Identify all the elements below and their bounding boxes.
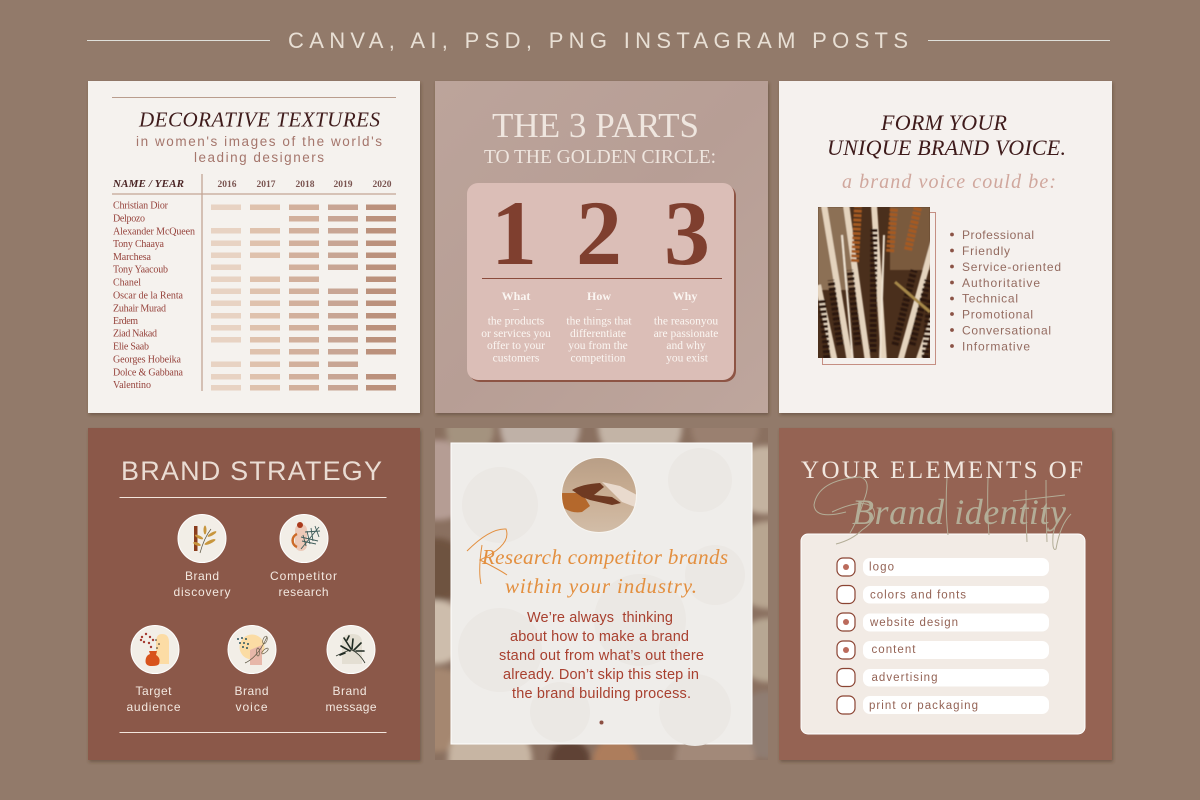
heading: form your brand voice	[827, 110, 1066, 160]
body text: We’re always thinking	[527, 610, 673, 626]
bullet list: Informative	[962, 340, 1030, 354]
heading: decorative textures: DECORATIVE TEXTURES	[138, 108, 380, 132]
designer names: Tony Yaacoub	[113, 264, 168, 276]
table header: 2017	[256, 180, 276, 190]
table header: NAME / YEAR	[112, 178, 184, 190]
checklist labels: print or packaging	[869, 700, 978, 712]
bullet list	[950, 228, 1061, 354]
label: brand discovery: discovery	[174, 585, 230, 599]
subheading: women's images: leading designers	[194, 150, 324, 165]
designer names	[113, 200, 195, 391]
column: how: How	[587, 289, 611, 303]
designer names: Oscar de la Renta	[113, 290, 184, 302]
subheading: women's images	[136, 134, 382, 165]
label: competitor research: research	[278, 585, 328, 599]
column: what: –	[512, 303, 519, 315]
icon: competitor research	[280, 514, 328, 562]
column: what: or services you	[481, 328, 551, 340]
script heading	[467, 529, 728, 598]
body text	[499, 610, 704, 702]
designer names: Ziad Nakad	[113, 328, 157, 340]
table header: 2020	[372, 180, 392, 190]
label: target audience	[126, 684, 181, 714]
label: brand message: message	[326, 700, 377, 714]
panel: decorative textures table	[88, 81, 420, 413]
panel: brand strategy	[88, 428, 420, 760]
table header	[112, 178, 392, 190]
checklist labels	[869, 562, 978, 712]
bullet list: Promotional	[962, 308, 1033, 322]
label: brand discovery: Brand	[185, 569, 219, 583]
table header: 2019	[334, 180, 353, 190]
column: why: Why	[673, 289, 697, 303]
panel: form your unique brand voice	[779, 81, 1112, 413]
body text: about how to make a brand	[510, 629, 689, 645]
designer names: Zuhair Murad	[113, 304, 166, 314]
column: what	[481, 289, 551, 364]
heading: your elements of: YOUR ELEMENTS OF	[801, 457, 1083, 484]
label: target audience: Target	[136, 684, 172, 698]
icon: brand discovery	[178, 514, 226, 562]
bars: 2019	[328, 204, 358, 390]
body text: the brand building process.	[512, 686, 691, 702]
heading: form your brand voice: UNIQUE BRAND VOICE.	[827, 135, 1066, 160]
script heading: within your industry.	[505, 574, 697, 598]
column: how: competition	[571, 352, 626, 364]
icon: brand voice	[228, 626, 276, 674]
designer names: Marchesa	[113, 252, 152, 263]
numerals	[491, 182, 710, 284]
numerals: 3	[664, 182, 710, 284]
bars: 2020	[366, 204, 396, 390]
designer names: Alexander McQueen	[113, 226, 195, 238]
designer names: Georges Hobeika	[113, 354, 182, 366]
pills	[863, 558, 1049, 714]
heading: the 3 parts: TO THE GOLDEN CIRCLE:	[484, 147, 716, 168]
label: brand message: Brand	[332, 684, 366, 698]
designer names: Christian Dior	[113, 200, 169, 212]
column: how: the things that	[566, 316, 632, 328]
column: why: are passionate	[654, 328, 718, 340]
bullet list: Service-oriented	[962, 260, 1061, 274]
card: research text	[451, 443, 752, 746]
card: checklist	[801, 534, 1085, 734]
designer names: Erdem	[113, 316, 138, 327]
checklist labels: content	[872, 644, 916, 656]
bars: 2017	[250, 204, 280, 390]
designer names: Dolce & Gabbana	[113, 368, 184, 378]
column: what: What	[502, 289, 530, 303]
subheading: women's images: in women's images of the world's	[136, 134, 382, 149]
panel: the 3 parts to the golden circle	[435, 81, 768, 413]
label: competitor research	[270, 569, 337, 599]
photo frame	[822, 212, 936, 364]
icon: target audience	[131, 626, 179, 674]
panel: research competitor brands	[435, 428, 768, 760]
bullet list: Technical	[962, 292, 1018, 306]
photo background: sea urchins	[435, 428, 768, 760]
table rules	[112, 174, 396, 391]
title: CANVA, AI, PSD, PNG INSTAGRAM POSTS	[288, 28, 908, 53]
bullet list: Friendly	[962, 244, 1010, 258]
column: how: differentiate	[570, 328, 626, 340]
checklist labels: colors and fonts	[870, 590, 966, 602]
designer names: Delpozo	[113, 214, 145, 224]
column: what: offer to your	[487, 340, 545, 352]
bars: 2018	[289, 204, 319, 390]
designer names: Chanel	[113, 278, 141, 288]
card: numbered parts	[467, 182, 736, 382]
table header: 2018	[296, 180, 315, 190]
label: brand voice: voice	[236, 700, 268, 714]
heading: the 3 parts: THE 3 PARTS	[492, 106, 699, 145]
designer names: Tony Chaaya	[113, 239, 165, 250]
label: brand voice: Brand	[234, 684, 268, 698]
script heading: brand identity	[814, 477, 1071, 549]
label: brand message	[326, 684, 377, 714]
bullet list: Professional	[962, 228, 1034, 242]
column: how: –	[595, 303, 602, 315]
column: why: –	[681, 303, 688, 315]
checklist labels: website design	[869, 617, 958, 629]
numerals: 1	[491, 182, 537, 284]
bullet list: Authoritative	[962, 276, 1040, 290]
body text: already. Don’t skip this step in	[503, 667, 699, 683]
table header: 2016	[218, 180, 237, 190]
bullet list: Conversational	[962, 324, 1051, 338]
column: what: the products	[488, 316, 545, 328]
label: brand voice	[234, 684, 268, 714]
checklist labels: advertising	[872, 672, 938, 684]
heading: the 3 parts	[484, 106, 716, 168]
photo: hands	[560, 457, 638, 533]
script subheading: a brand voice could be:	[842, 171, 1056, 193]
checkboxes	[837, 558, 855, 714]
label: brand discovery	[174, 569, 230, 599]
column: why: you exist	[666, 352, 709, 364]
panel: your elements of brand identity	[779, 428, 1112, 760]
column: why: the reasonyou	[654, 316, 718, 328]
column: what: customers	[493, 352, 540, 364]
script heading: Research competitor brands	[481, 545, 728, 569]
column: why	[654, 289, 718, 364]
heading: form your brand voice: FORM YOUR	[880, 110, 1008, 135]
icon: brand message	[327, 626, 375, 674]
label: competitor research: Competitor	[270, 569, 337, 583]
checklist labels: logo	[869, 562, 894, 574]
bars: 2016	[211, 204, 241, 390]
column: why: and why	[666, 340, 706, 352]
label: target audience: audience	[126, 700, 181, 714]
numerals: 2	[576, 182, 622, 284]
column: how	[566, 289, 632, 364]
body text: stand out from what’s out there	[499, 648, 704, 664]
photo: banksia leaves	[818, 205, 934, 362]
heading: brand strategy: BRAND STRATEGY	[121, 456, 382, 486]
designer names: Elie Saab	[113, 342, 149, 352]
script heading: brand identity: Brand identity	[852, 492, 1066, 532]
designer names: Valentino	[113, 380, 151, 391]
column: how: you from the	[568, 340, 628, 352]
